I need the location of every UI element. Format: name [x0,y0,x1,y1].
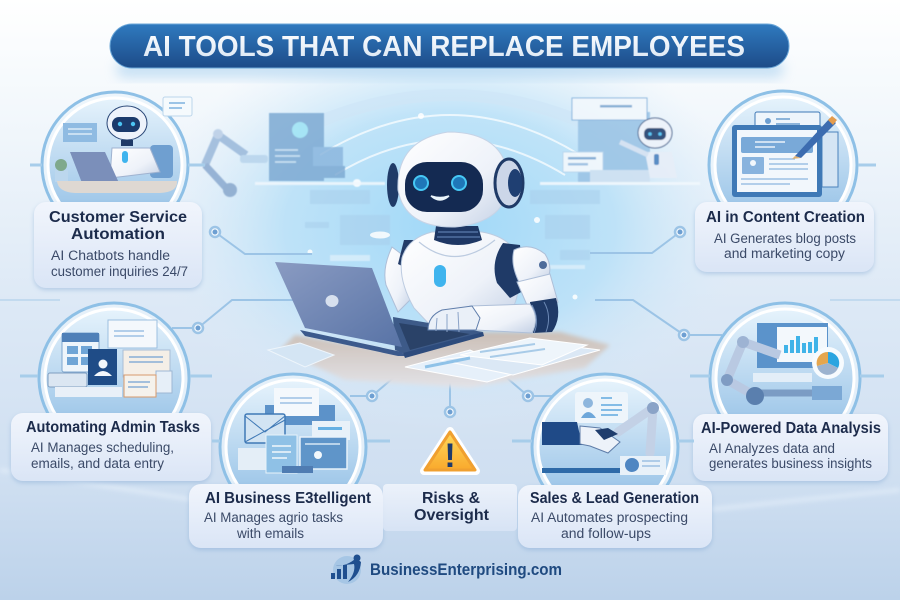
panel: AI business intelligence [189,374,390,548]
icon: calendar and documents [20,303,212,453]
background tech scene: left [205,113,385,197]
label card [34,202,202,288]
panel: customer service automation [30,92,205,288]
panel: sales and lead generation [512,374,712,548]
heading: Sales & Lead Generation [530,490,699,507]
icon: growth logo [331,554,361,584]
description: AI Chatbots handle [51,248,170,263]
description line two: with emails [236,526,304,541]
panel: AI in content creation [695,91,876,272]
website name: BusinessEnterprising.com [370,560,562,579]
icon: robot arm and chart [690,303,884,453]
icon: documents and pencil [709,91,876,239]
footer brand [331,554,562,584]
paper stack [268,338,600,382]
central robot at laptop [268,132,610,388]
description line two: and marketing copy [724,246,845,261]
panel: AI-powered data analysis [690,303,888,481]
description: AI Manages agrio tasks [204,510,343,525]
heading line two: Oversight [414,507,490,524]
chest collar line [419,240,495,257]
robot right arm [470,274,558,333]
label card [693,414,888,481]
circuit connectors [0,227,900,417]
title banner [110,24,789,78]
desk [280,332,610,388]
robot torso [401,232,519,325]
heading: Risks & [422,490,480,507]
robot hand [428,306,480,332]
heading: AI in Content Creation [706,209,865,226]
heading: AI Business E3telligent [205,490,372,507]
icon: handshake [512,374,694,520]
robot left shoulder joint [398,240,418,273]
label card [11,413,211,481]
chest light [434,265,446,287]
heading: Customer Service [49,209,187,226]
title banner: AI TOOLS THAT CAN REPLACE EMPLOYEES [143,31,745,63]
label card [695,202,874,272]
label card [518,485,712,548]
description line two: emails, and data entry [31,456,164,471]
description: AI Analyzes data and [709,441,835,456]
laptop [275,262,484,358]
description line two: and follow-ups [561,526,651,541]
icon: mail and reports [212,374,390,520]
robot left arm [385,247,412,312]
description: AI Generates blog posts [714,231,856,246]
heading: AI-Powered Data Analysis [701,420,881,437]
description line two: customer inquiries 24/7 [51,264,188,279]
heading: Automating Admin Tasks [26,419,200,436]
heading line two: Automation [71,226,165,243]
label card [383,484,517,531]
icon: customer service robot [30,92,205,238]
label card [189,484,383,548]
icon: warning triangle: ! [444,437,456,475]
panel: automating admin tasks [11,303,212,481]
description: AI Automates prospecting [531,510,688,525]
robot right shoulder [495,243,550,298]
description: AI Manages scheduling, [31,440,174,455]
robot neck [434,226,482,245]
background tech scene: right [540,98,700,185]
panel: risks and oversight [383,431,517,531]
description line two: generates business insights [709,456,872,471]
robot head [387,132,523,227]
